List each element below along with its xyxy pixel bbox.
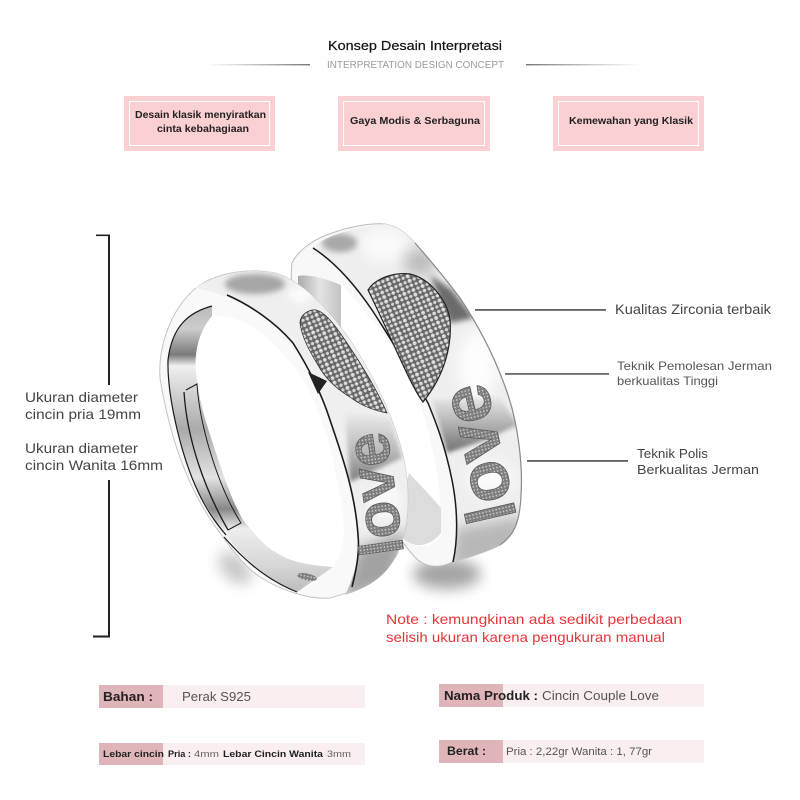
left ring edge lines [168, 295, 358, 592]
title: Konsep Desain Interpretasi [328, 38, 502, 53]
spec: weight [439, 740, 704, 763]
spec: ring width: Lebar cincin [103, 749, 164, 760]
note: selisih ukuran karena pengukuran manual [386, 629, 665, 645]
callout: polishing technique [505, 359, 772, 388]
diameter text: cincin Wanita 16mm [25, 457, 163, 473]
callout: polishing technique: berkualitas Tinggi [617, 374, 718, 388]
feature box: classic luxury: Kemewahan yang Klasik [569, 116, 693, 127]
spec: ring width: 3mm [327, 749, 351, 760]
spec: ring width: Pria : [168, 749, 191, 760]
diameter text: Ukuran diameter [25, 440, 138, 456]
left ring hallmark [296, 571, 318, 583]
left ring inner band [168, 306, 333, 592]
left love engraving: love [332, 428, 418, 561]
feature box: classic design: cinta kebahagiaan [157, 124, 249, 135]
spec: ring width: 4mm [194, 749, 219, 760]
feature box: classic design [124, 96, 275, 151]
diameter text: cincin pria 19mm [25, 406, 141, 422]
ring shadows [212, 545, 481, 591]
diameter text: Ukuran diameter [25, 389, 138, 405]
right ring inner back band bottom [395, 473, 441, 545]
spec: material: Bahan : [103, 689, 153, 704]
right ring inner edge line [313, 248, 457, 562]
note [386, 611, 682, 645]
callout: polish quality [527, 446, 759, 477]
right ring [291, 215, 532, 575]
right ring face [314, 224, 520, 562]
left ring [160, 265, 418, 600]
spec: product name: Cincin Couple Love [542, 688, 659, 703]
spec: material [99, 685, 365, 708]
feature box: modern and versatile [338, 96, 490, 151]
note: Note : kemungkinan ada sedikit perbedaan [386, 611, 682, 627]
spec: weight: Pria : 2,22gr Wanita : 1, 77gr [506, 746, 652, 758]
subtitle with rules: INTERPRETATION DESIGN CONCEPT [327, 60, 504, 71]
left ring face [190, 265, 415, 600]
callout: polish quality: Berkualitas Jerman [637, 462, 759, 477]
right love engraving: love [424, 377, 532, 531]
right half heart [368, 274, 450, 402]
diameter bracket [93, 234, 110, 638]
feature box: classic luxury [553, 96, 704, 151]
feature box: modern and versatile: Gaya Modis & Serbaguna [350, 116, 480, 127]
left ring opening [196, 316, 344, 567]
callout: polishing technique: Teknik Pemolesan Jerman [617, 359, 772, 373]
right ring inner back band top [298, 275, 341, 345]
spec: weight: Berat : [447, 744, 486, 758]
callout: zirconia: Kualitas Zirconia terbaik [615, 302, 771, 317]
spec: material: Perak S925 [182, 689, 251, 704]
spec: product name [439, 684, 704, 707]
left ring silhouette [160, 271, 408, 598]
left half heart [300, 310, 387, 413]
spec: product name: Nama Produk : [444, 688, 538, 703]
left ring notch below heart [308, 372, 327, 394]
feature box: classic design: Desain klasik menyiratkan [135, 110, 266, 121]
right ring outer edge [415, 243, 521, 545]
diameter text [25, 389, 163, 473]
callout: polish quality: Teknik Polis [637, 446, 709, 461]
spec: ring width [99, 743, 365, 765]
right ring opening [296, 278, 441, 546]
spec: ring width: Lebar Cincin Wanita [223, 749, 324, 760]
right ring silhouette [291, 224, 521, 566]
